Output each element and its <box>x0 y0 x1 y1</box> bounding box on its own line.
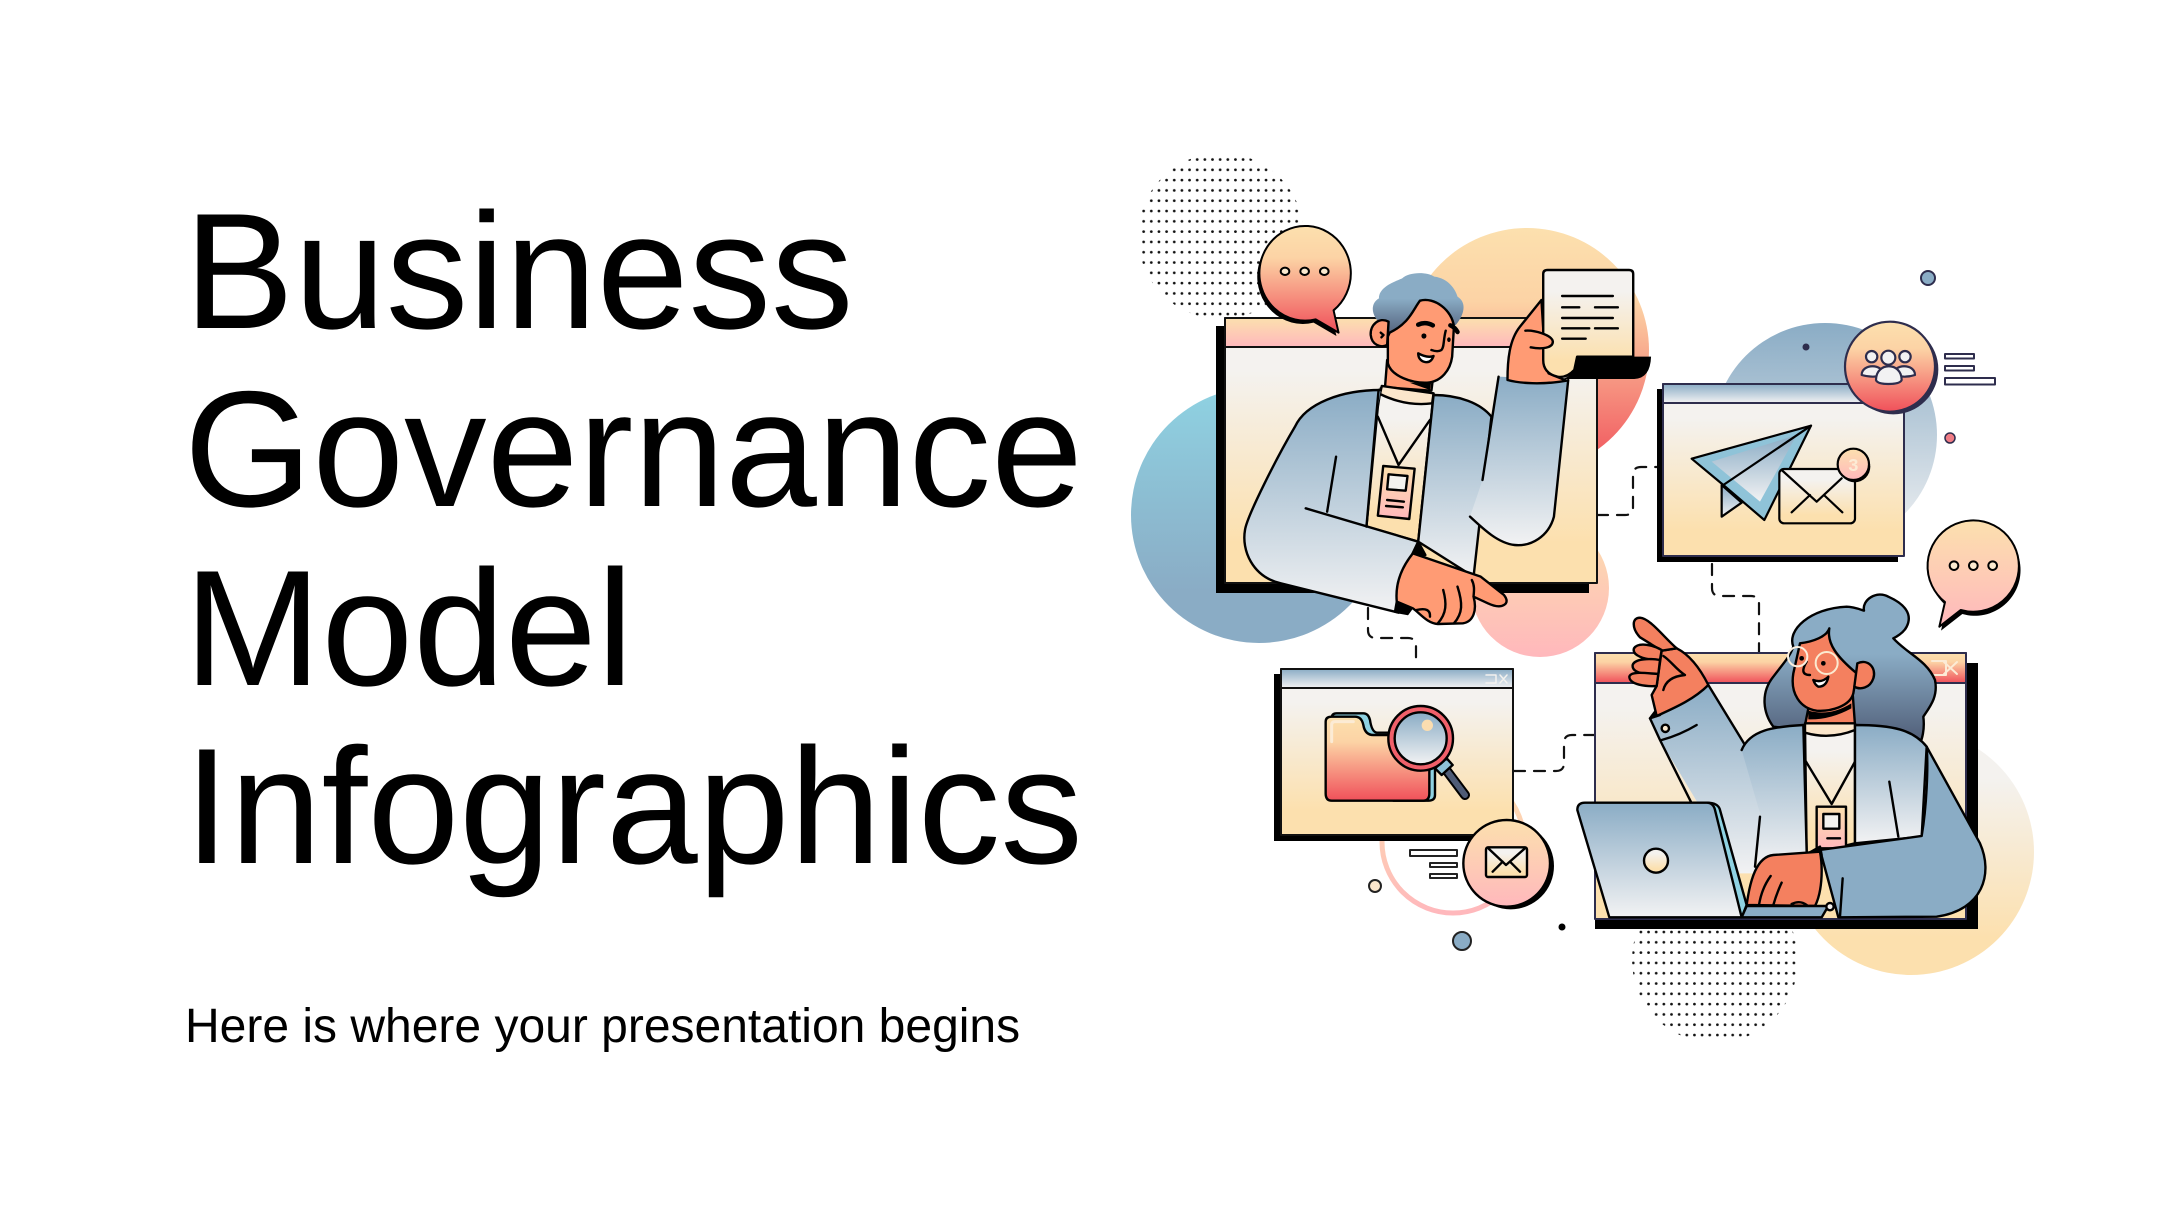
connector: man window to folder window <box>1368 608 1416 664</box>
icon: team circle <box>1845 322 1938 414</box>
circle: peach behind woman <box>1788 729 2034 975</box>
title: Infographics <box>184 714 1083 898</box>
laptop <box>1577 803 1747 917</box>
man head <box>1371 300 1457 383</box>
woman neck <box>1805 693 1855 725</box>
dot pattern: upper left <box>1138 153 1304 319</box>
connector: man window to message window <box>1597 467 1657 515</box>
notification badge <box>1838 449 1870 482</box>
man id badge <box>1378 466 1415 519</box>
magnifier <box>1388 706 1465 795</box>
dot: navy <box>1802 344 1810 350</box>
icon: mail circle <box>1463 820 1554 909</box>
laptop base <box>1742 903 1834 917</box>
man hair <box>1373 273 1464 337</box>
window: message <box>1657 384 1904 562</box>
subtitle: Here is where your presentation begins <box>185 1000 1020 1053</box>
speech bubble: right <box>1928 520 2021 631</box>
title: Model <box>184 536 633 720</box>
dot: blue bottom <box>1453 932 1471 950</box>
woman hair <box>1765 595 1936 743</box>
woman head <box>1788 628 1874 711</box>
dot: pink <box>1945 433 1955 443</box>
window: man <box>1216 318 1597 593</box>
connector: message window to woman window <box>1712 564 1759 654</box>
speech bubble: upper left <box>1257 226 1351 336</box>
woman jacket <box>1742 725 1927 867</box>
title <box>184 179 1083 898</box>
dot: blue top <box>1921 271 1935 285</box>
character: woman <box>1577 595 1985 917</box>
icon: paper plane and envelope <box>1692 426 1870 523</box>
paper document <box>1543 270 1633 377</box>
title: Governance <box>184 357 1083 541</box>
paper roll <box>1563 357 1651 379</box>
title: Business <box>184 179 854 363</box>
character: man <box>1244 270 1651 624</box>
man finger on paper <box>1525 331 1553 348</box>
woman raised arm <box>1650 685 1760 873</box>
window: folder <box>1274 669 1513 841</box>
notification badge: 3 <box>1848 455 1858 475</box>
woman shirt <box>1805 723 1855 855</box>
woman typing hand <box>1747 847 1822 906</box>
man pointing hand <box>1395 542 1507 624</box>
circle: pink <box>1471 519 1609 657</box>
circle: peach red <box>1405 228 1649 472</box>
dot pattern: lower <box>1632 877 1798 1043</box>
envelope <box>1779 469 1855 523</box>
man shirt <box>1366 386 1434 542</box>
woman raised hand <box>1629 618 1708 740</box>
dot: black <box>1558 924 1566 930</box>
ring: pink <box>1382 771 1524 913</box>
woman id badge <box>1817 807 1846 848</box>
man raised hand <box>1507 300 1566 383</box>
text lines next to mail circle <box>1410 850 1457 878</box>
man jacket and arm <box>1244 390 1491 613</box>
circle: pale blue behind message window <box>1713 323 1937 547</box>
dot: peach <box>1369 880 1381 892</box>
circle: teal blue <box>1131 387 1387 643</box>
text lines next to team circle <box>1945 354 1995 384</box>
man neck <box>1385 360 1434 391</box>
window: woman <box>1595 653 1978 929</box>
man raised arm <box>1470 377 1568 545</box>
icon: folder with magnifier <box>1326 706 1465 801</box>
woman forearm <box>1820 747 1985 917</box>
connector: folder window to woman window <box>1514 735 1595 771</box>
